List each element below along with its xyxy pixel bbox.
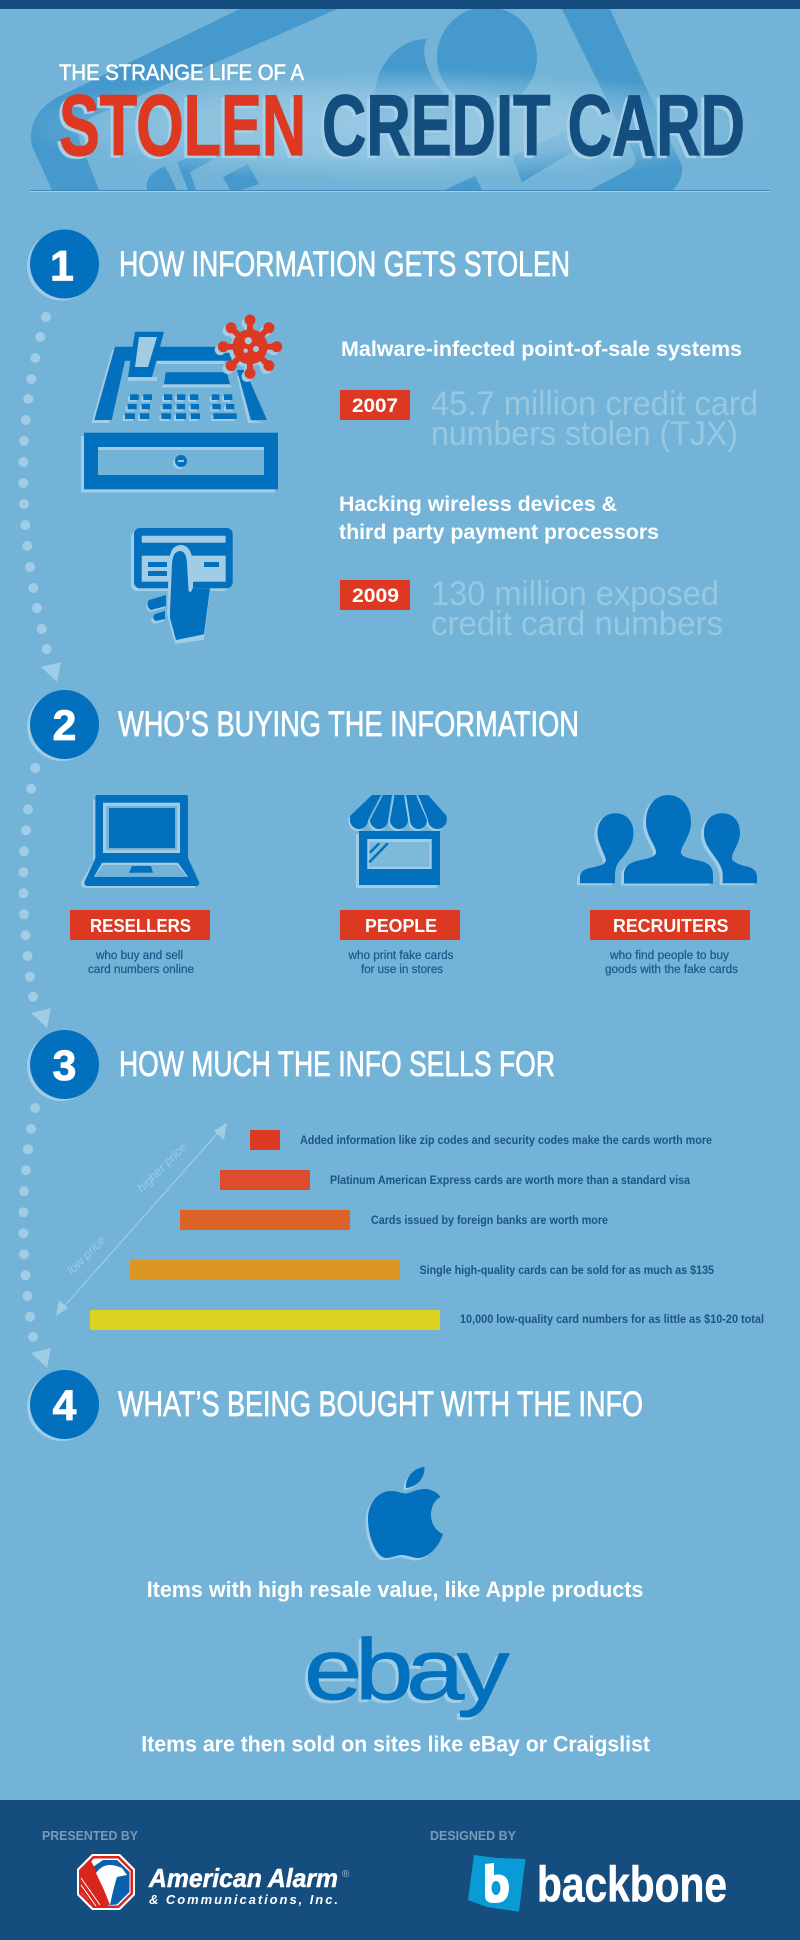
keys	[125, 394, 237, 419]
label: resellers	[70, 910, 210, 940]
text: recruiters description: who find people to buy	[609, 950, 729, 962]
stat 2007: numbers stolen (TJX)	[431, 415, 738, 453]
text: apple caption: Items with high resale value, like Apple products	[147, 1577, 643, 1602]
label: higher price: higher price	[134, 1140, 190, 1195]
icon: storefront	[348, 795, 447, 888]
header background: credit card and people silhouettes	[31, 9, 720, 190]
section 4 heading	[27, 1370, 643, 1441]
bar: foreign banks: Cards issued by foreign banks are worth more	[371, 1215, 608, 1227]
text: ebay caption: Items are then sold on sites like eBay or Craigslist	[141, 1732, 651, 1757]
icon: laptop	[81, 795, 199, 888]
bar: low-quality: 10,000 low-quality card numbers for as little as $10-20 total	[460, 1314, 764, 1326]
text: malware: Malware-infected point-of-sale systems	[341, 337, 742, 361]
text: hacking	[339, 492, 659, 544]
bar: added information	[250, 1130, 712, 1150]
dotted path 3	[18, 1103, 51, 1368]
logo: backbone: backbone	[537, 1857, 727, 1913]
logo: ebay: ebay	[304, 1622, 510, 1718]
footer	[0, 1800, 800, 1940]
bar: single high-quality: Single high-quality cards can be sold for as much as $135	[420, 1265, 715, 1277]
number badge 4: 4	[53, 1382, 77, 1430]
key shadows	[123, 396, 235, 421]
register body	[94, 347, 267, 420]
logo: backbone	[468, 1855, 727, 1913]
footer label: designed by: DESIGNED BY	[430, 1828, 516, 1843]
heading text 1: HOW INFORMATION GETS STOLEN	[119, 245, 570, 284]
number badge 3	[27, 1030, 99, 1101]
label: recruiters: RECRUITERS	[613, 915, 728, 936]
title	[56, 60, 745, 176]
price axis arrow	[56, 1122, 227, 1316]
logo: american alarm	[77, 1854, 350, 1910]
number badge 2: 2	[53, 702, 76, 750]
top bar	[0, 0, 800, 9]
panel: stolen information text	[339, 337, 758, 643]
section 2 heading	[27, 690, 579, 761]
label: low price: low price	[64, 1233, 108, 1277]
bar: foreign banks	[180, 1210, 608, 1230]
heading text 2: WHO’S BUYING THE INFORMATION	[118, 705, 579, 744]
text: resellers description: who buy and sell	[95, 950, 183, 962]
title: shadow stolen: STOLEN	[56, 80, 303, 176]
price bar chart	[90, 1130, 764, 1330]
stat 2007: 45.7 million credit card	[431, 385, 758, 423]
heading text 4: WHAT’S BEING BOUGHT WITH THE INFO	[118, 1385, 643, 1424]
heading text 3: HOW MUCH THE INFO SELLS FOR	[119, 1045, 555, 1084]
stat 2009: credit card numbers	[431, 605, 723, 643]
text: recruiters description: goods with the fake cards	[605, 964, 738, 976]
title: kicker line: THE STRANGE LIFE OF A	[59, 60, 304, 85]
section 3 heading	[27, 1030, 555, 1101]
label: resellers: RESELLERS	[90, 915, 191, 936]
header rule	[30, 190, 770, 192]
drawer	[81, 433, 278, 492]
receipt	[128, 332, 164, 377]
year badge 2007: 2007	[352, 396, 398, 417]
bar: single high-quality	[130, 1260, 715, 1280]
logo: american alarm: American Alarm	[148, 1863, 338, 1893]
bar: platinum	[220, 1170, 691, 1190]
title: stolen: STOLEN	[59, 78, 306, 174]
bar: platinum: Platinum American Express cards are worth more than a standard visa	[330, 1175, 691, 1187]
text: people description: for use in stores	[361, 964, 443, 976]
logo: american alarm: & Communications, Inc.	[149, 1892, 338, 1907]
text: recruiters description	[605, 950, 738, 976]
text: people description: who print fake cards	[347, 950, 454, 962]
bar: added information: Added information like zip codes and security codes make the cards worth more	[300, 1135, 712, 1147]
label: recruiters	[590, 910, 750, 940]
icon: cash register	[81, 315, 282, 492]
number badge 1: 1	[50, 242, 74, 290]
section 1 heading	[27, 230, 570, 300]
text: hacking: Hacking wireless devices &	[339, 492, 617, 516]
logo: ebay: ebay	[301, 1625, 507, 1721]
text: people description	[347, 950, 454, 976]
year badge 2009	[340, 580, 410, 610]
icon: hand swiping card	[131, 528, 233, 644]
dotted path 2	[18, 763, 51, 1028]
bar: low-quality	[90, 1310, 764, 1330]
icon: virus	[215, 315, 282, 381]
footer label: presented by: PRESENTED BY	[42, 1828, 138, 1843]
number badge 3: 3	[53, 1042, 76, 1090]
number badge 2	[27, 690, 99, 761]
dotted path 1	[18, 312, 61, 682]
label: people: PEOPLE	[365, 915, 437, 936]
icon: group of people	[577, 795, 757, 886]
logo: american alarm: ®	[342, 1869, 350, 1880]
stat 2009: 130 million exposed	[431, 575, 719, 613]
label: people	[340, 910, 460, 940]
number badge 4	[27, 1370, 99, 1441]
stat 2009	[431, 575, 723, 643]
year badge 2009: 2009	[352, 586, 399, 607]
text: resellers description: card numbers online	[88, 964, 194, 976]
icon: apple	[366, 1467, 443, 1560]
text: resellers description	[88, 950, 194, 976]
text: hacking: third party payment processors	[339, 520, 659, 544]
register body shadow	[92, 350, 264, 423]
stat 2007	[431, 385, 758, 453]
year badge 2007	[340, 390, 410, 420]
number badge 1	[27, 230, 99, 300]
